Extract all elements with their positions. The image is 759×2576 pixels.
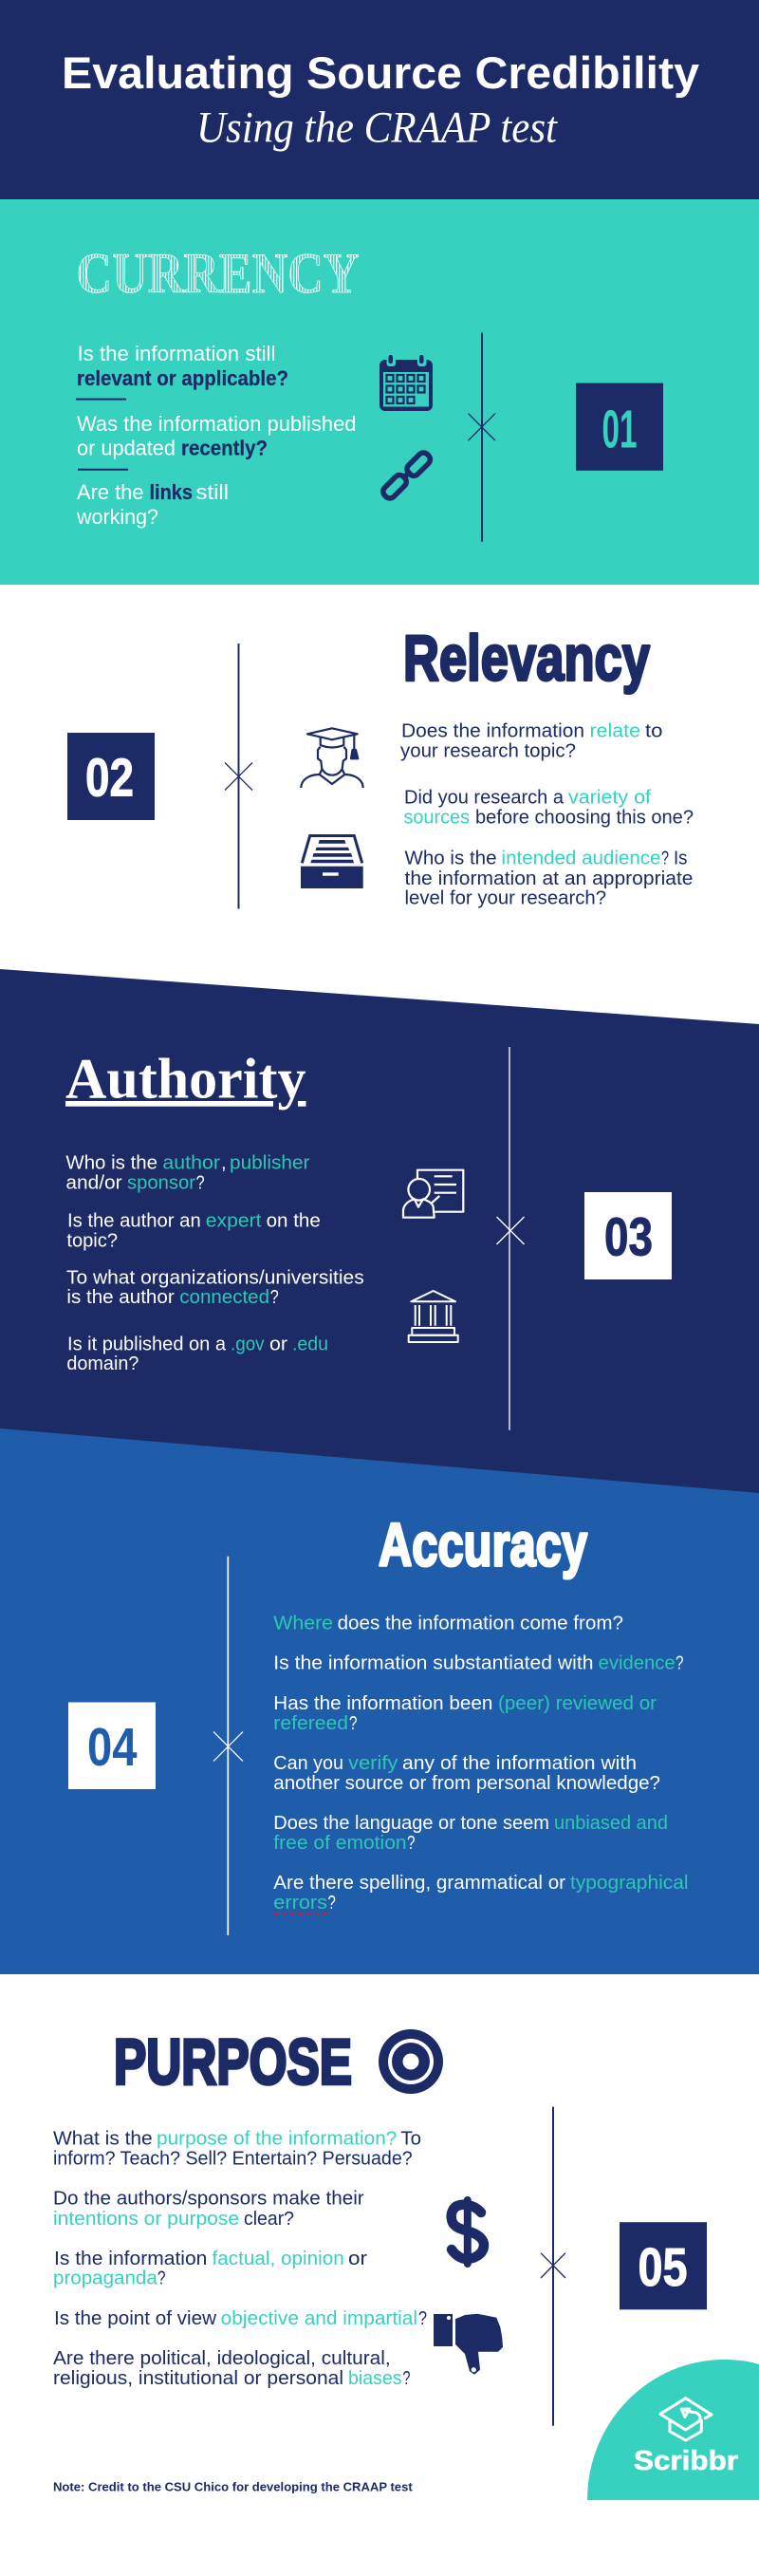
question: intended audience: Is [674,849,687,869]
icon: archive drawer [301,835,363,888]
question: unbiased: ? [407,1833,416,1854]
question: factual opinion propaganda: or [348,2249,367,2269]
question: variety of sources: Did you research a [404,788,565,809]
number badge 05 [620,2222,707,2309]
icon: calendar [380,355,433,411]
question: links working: working? [76,505,158,529]
panel: relevancy [0,585,759,983]
question: still relevant: Is the information still [78,342,275,365]
question: verify: verify [348,1753,398,1774]
question: relate [400,721,662,762]
question: published recently [77,412,357,460]
panel: currency [0,199,759,585]
question: evidence: ? [676,1653,683,1674]
footnote: Note: Credit to the CSU Chico for developing the CRAAP test [53,2480,413,2494]
question: intentions: Do the authors/sponsors make their [53,2189,364,2210]
question: verify [273,1753,660,1794]
question: biases: Are there political, ideological, cultural, [53,2348,391,2369]
question: author publisher sponsor: and/or [65,1173,122,1194]
question: relate: to [645,721,662,742]
question: factual opinion propaganda: ? [157,2268,165,2289]
question: objective and impartial: objective and impartial [221,2308,417,2329]
question: connected: To what organizations/universities [66,1268,364,1289]
question: variety of sources: before choosing this one? [475,808,694,829]
question: relate: Does the information [401,721,584,742]
icon: target [379,2029,443,2094]
question: connected: is the author [66,1287,175,1308]
heading: authority: Authority [65,1048,305,1111]
icon: dollar sign [452,2200,484,2264]
question: intended audience: ? [661,849,669,869]
question: published recently: recently? [181,437,268,460]
question: intentions [53,2189,364,2230]
question: links working: links [150,480,193,504]
question: where: Where [273,1614,333,1634]
number badge 03: 03 [604,1206,653,1267]
question: errors [273,1873,689,1913]
number badge 04: 04 [87,1717,138,1778]
question: verify: Can you [273,1753,343,1774]
number badge 02: 02 [85,747,134,808]
divider with cross [213,1557,243,1935]
question: unbiased: Does the language or tone seem [273,1813,549,1834]
question: domain: domain? [66,1353,139,1374]
question: variety of sources [404,788,694,829]
question: peer reviewed: Has the information been [273,1693,492,1714]
logo: scribbr badge [587,2360,759,2500]
question: intentions: clear? [244,2209,294,2230]
question: domain: or [269,1335,287,1355]
question: relate: relate [590,721,640,742]
title: Evaluating Source Credibility [62,47,699,98]
icon: presenter [403,1170,463,1218]
panel: accuracy [0,1428,759,1974]
divider with cross [469,332,495,542]
icon: chain link [380,451,433,500]
question: connected: ? [270,1287,279,1308]
question: intended audience: the information at an appropriate [404,868,693,889]
question: links working [76,480,229,529]
question: errors: ? [327,1893,336,1913]
question: biases: biases [348,2368,402,2389]
question: purpose of information: inform? Teach? Sell? Entertain? Persuade? [53,2148,413,2169]
question: peer reviewed: refereed [273,1713,348,1734]
question: purpose of information [53,2129,421,2169]
question: domain: .edu [292,1335,328,1355]
heading: currency: CURRENCY [76,242,359,305]
question: expert [66,1211,321,1251]
question: intended audience: level for your research? [404,888,606,909]
question: author publisher sponsor [65,1153,310,1194]
wordmark: Scribbr [634,2446,738,2476]
question: author publisher sponsor: ? [196,1173,205,1194]
question: objective and impartial [54,2308,427,2329]
subtitle: Using the CRAAP test [196,103,558,152]
question: intentions: intentions or purpose [53,2209,239,2230]
icon: graduate [301,728,363,788]
question: expert: Is the author an [67,1211,201,1232]
icon: institution building [409,1291,458,1342]
number badge 03 [584,1192,672,1279]
question: expert: topic? [66,1230,118,1251]
question: connected: connected [179,1287,269,1308]
question: errors: Are there spelling, grammatical or [273,1873,565,1894]
heading: accuracy: Accuracy [379,1510,587,1578]
question: still relevant [77,342,288,390]
question: published recently: Was the information published [77,412,357,436]
question: domain: .gov [231,1335,265,1355]
question: peer reviewed: (peer) reviewed or [498,1693,657,1714]
divider with cross [541,2107,565,2426]
question: variety of sources: sources [404,808,470,829]
question: domain [66,1335,328,1374]
question: domain: Is it published on a [67,1335,227,1355]
panel: authority [0,969,759,1519]
question: variety of sources: variety of [568,788,651,809]
heading: purpose: PURPOSE [114,2026,352,2099]
question: factual opinion propaganda [53,2249,367,2289]
number badge 01 [576,383,663,471]
question: purpose of information: To [400,2129,421,2150]
question: author publisher sponsor: Who is the [65,1153,157,1174]
heading: relevancy: Relevancy [403,623,650,695]
question: links working: Are the [77,480,144,504]
question: peer reviewed [273,1693,657,1734]
question: links working: still [195,480,229,504]
divider with cross [497,1047,524,1430]
question: author publisher sponsor: , [221,1153,227,1174]
question: intended audience [404,849,693,909]
panel: page header [0,0,759,199]
question: connected [66,1268,364,1308]
icon: thumbs down [434,2314,503,2375]
question: expert: expert [206,1211,262,1232]
question: published recently: or updated [77,437,176,460]
question: expert: on the [267,1211,321,1232]
icon: scribbr graduation cap [660,2399,712,2440]
question: errors: typographical [570,1873,689,1894]
question: author publisher sponsor: publisher [230,1153,310,1174]
question: verify: another source or from personal knowledge? [273,1773,660,1794]
number badge 01: 01 [602,399,638,459]
question: purpose of information: purpose of the information? [157,2129,397,2150]
question: relate: your research topic? [400,741,576,762]
question: objective and impartial: Is the point of view [54,2308,217,2329]
question: factual opinion propaganda: Is the information [54,2249,207,2269]
question: unbiased: unbiased and [554,1813,668,1834]
question: unbiased [273,1813,668,1854]
divider with cross [225,644,252,909]
question: factual opinion propaganda: propaganda [53,2268,158,2289]
question: evidence: evidence [599,1653,676,1674]
question: intended audience: intended audience [501,849,660,869]
number badge 02 [67,733,155,820]
question: verify: any of the information with [402,1753,637,1774]
question: biases: religious, institutional or personal [53,2368,343,2389]
question: intended audience: Who is the [404,849,497,869]
question: factual opinion propaganda: factual, opinion [213,2249,344,2269]
number badge 04 [68,1703,156,1789]
number badge 05: 05 [638,2237,687,2298]
question: peer reviewed: ? [349,1713,357,1734]
question: still relevant: relevant or applicable? [77,366,288,390]
question: unbiased: free of emotion [273,1833,407,1854]
question: objective and impartial: ? [418,2308,427,2329]
question: biases [53,2348,410,2389]
question: errors: errors [273,1893,327,1913]
question: evidence: Is the information substantiated with [273,1653,594,1674]
question: author publisher sponsor: sponsor [127,1173,195,1194]
question: purpose of information: What is the [53,2129,153,2150]
panel: purpose [0,1974,759,2576]
question: biases: ? [402,2368,410,2389]
question: author publisher sponsor: author [162,1153,220,1174]
question: where: does the information come from? [338,1614,623,1634]
